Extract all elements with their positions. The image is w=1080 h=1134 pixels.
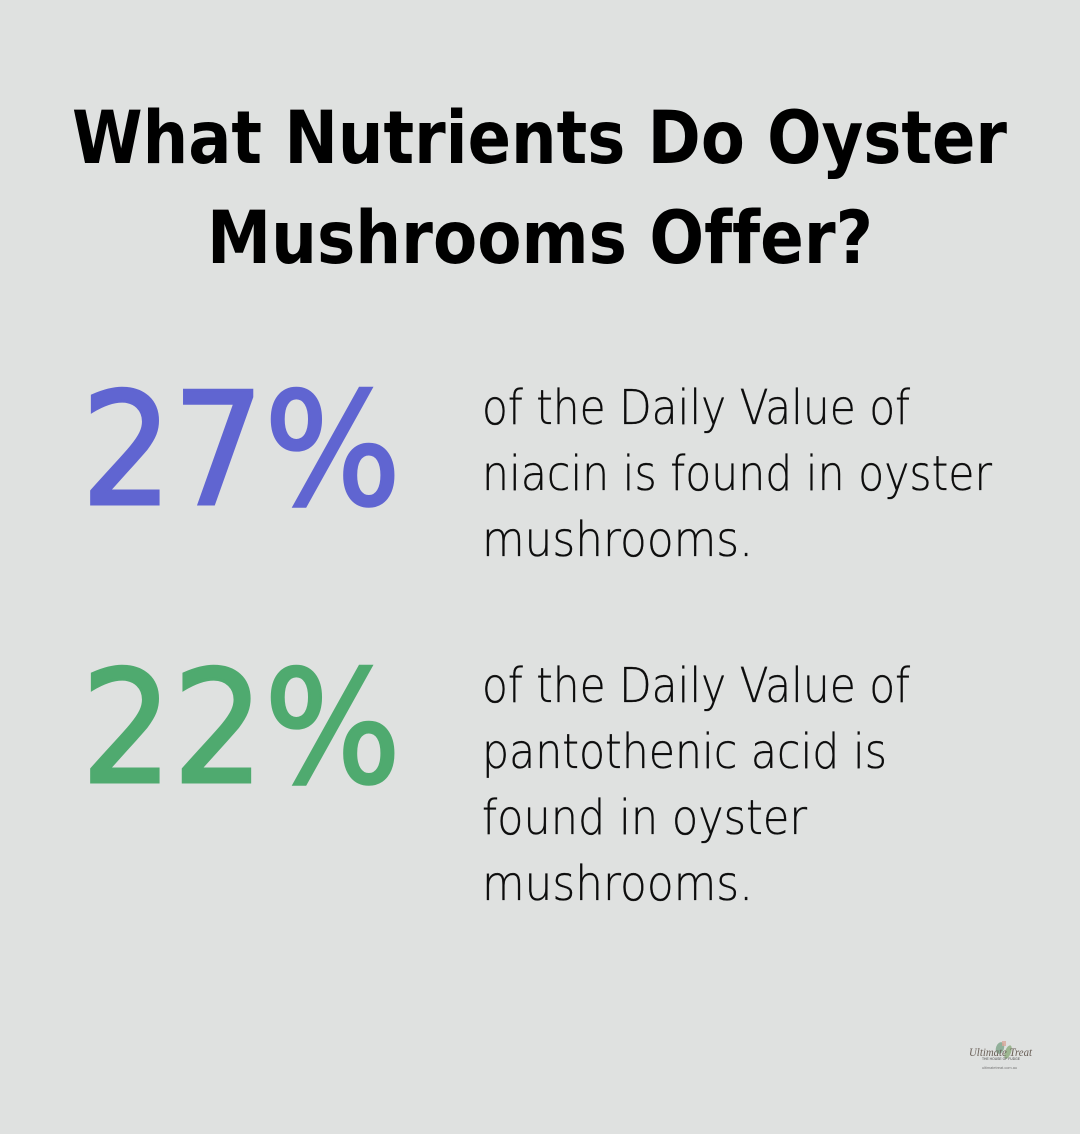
stat description pantothenic acid: found in oyster [482,790,807,846]
stat description niacin: niacin is found in oyster [482,446,992,502]
stat number 22%: 22% [81,637,401,819]
title: Mushrooms Offer? [207,196,873,281]
title [72,96,1007,281]
stat description pantothenic acid: mushrooms. [482,856,753,912]
stat description niacin: of the Daily Value of [482,380,910,436]
logo url: ultimatetreat.com.au [982,1066,1017,1070]
logo: Ultimate Treat [969,1041,1033,1070]
logo leaf icon [994,1041,1013,1060]
stat description pantothenic acid: pantothenic acid is [482,724,887,780]
stat: 27% niacin [81,359,992,568]
logo wordmark: Ultimate Treat [969,1045,1033,1059]
stat description pantothenic acid [482,658,910,912]
stat: 22% pantothenic acid [81,637,910,912]
stat number 27%: 27% [81,359,401,541]
stat description niacin: mushrooms. [482,512,753,568]
stat description pantothenic acid: of the Daily Value of [482,658,910,714]
logo tagline: THE HOUSE OF FUDGE [982,1057,1021,1061]
stat description niacin [482,380,992,568]
